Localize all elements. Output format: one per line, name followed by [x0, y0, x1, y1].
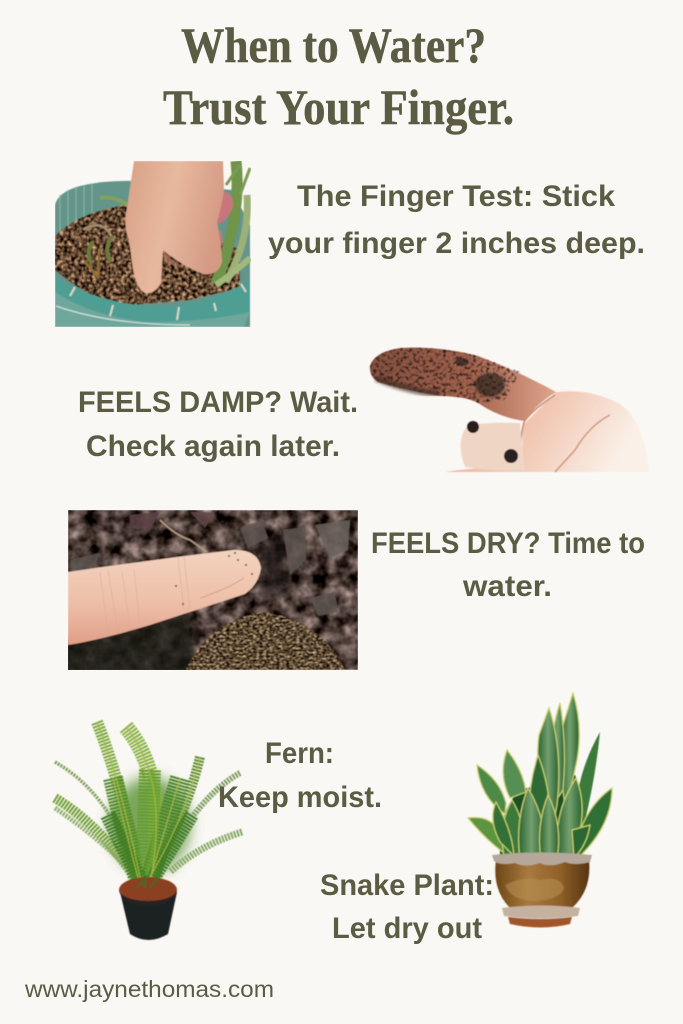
dark soil areas — [68, 612, 203, 670]
photo: dry soil with finger — [60, 510, 358, 680]
root ball — [186, 612, 345, 670]
ground — [68, 510, 358, 670]
dark leaf base mass — [500, 775, 586, 855]
pot rim — [492, 852, 592, 866]
green plant behind hand — [100, 161, 250, 285]
text: feels damp: Check again later. — [86, 430, 340, 463]
photo: dirty finger and hand — [370, 348, 649, 472]
saucer — [502, 906, 580, 918]
pot — [120, 892, 177, 940]
soft foliage mass — [110, 777, 190, 873]
hand — [125, 161, 224, 293]
rocks — [70, 512, 350, 616]
soil on finger — [370, 348, 520, 403]
leaves — [468, 693, 612, 859]
pot back wall — [55, 181, 250, 327]
finger — [68, 550, 261, 645]
text: fern: Keep moist. — [218, 781, 382, 814]
palm — [445, 391, 649, 472]
index finger — [370, 348, 556, 421]
text: fern — [218, 737, 382, 814]
title: When to Water? — [181, 17, 486, 73]
text: the finger test: your finger 2 inches deep. — [268, 227, 645, 260]
text: feels dry — [371, 527, 645, 603]
fronds — [55, 722, 242, 888]
text: snake plant — [320, 869, 494, 945]
text: the finger test: The Finger Test: Stick — [297, 180, 615, 213]
pot body — [495, 860, 589, 908]
fern plant — [55, 722, 242, 940]
text: snake plant: Let dry out — [332, 912, 482, 945]
text: snake plant: Snake Plant: — [320, 869, 494, 902]
text: feels damp: FEELS DAMP? Wait. — [78, 386, 358, 419]
text: the finger test — [268, 180, 645, 260]
soil clumps on thumb — [467, 421, 479, 433]
pot rim with soil — [119, 877, 177, 903]
soil — [55, 200, 240, 306]
title: Trust Your Finger. — [163, 79, 514, 135]
seedling — [84, 225, 113, 277]
text: feels dry: water. — [462, 570, 552, 603]
text: fern: Fern: — [265, 737, 334, 770]
title — [163, 17, 514, 135]
website url: www.jaynethomas.com — [24, 976, 274, 1002]
thumb — [461, 423, 525, 471]
pot rim — [55, 277, 250, 322]
photo: finger in pot soil — [55, 161, 250, 327]
knuckled fingers — [216, 192, 233, 224]
small root — [160, 520, 207, 552]
text: feels dry: FEELS DRY? Time to — [371, 527, 645, 560]
snake plant — [468, 693, 612, 928]
text: feels damp — [78, 386, 358, 463]
